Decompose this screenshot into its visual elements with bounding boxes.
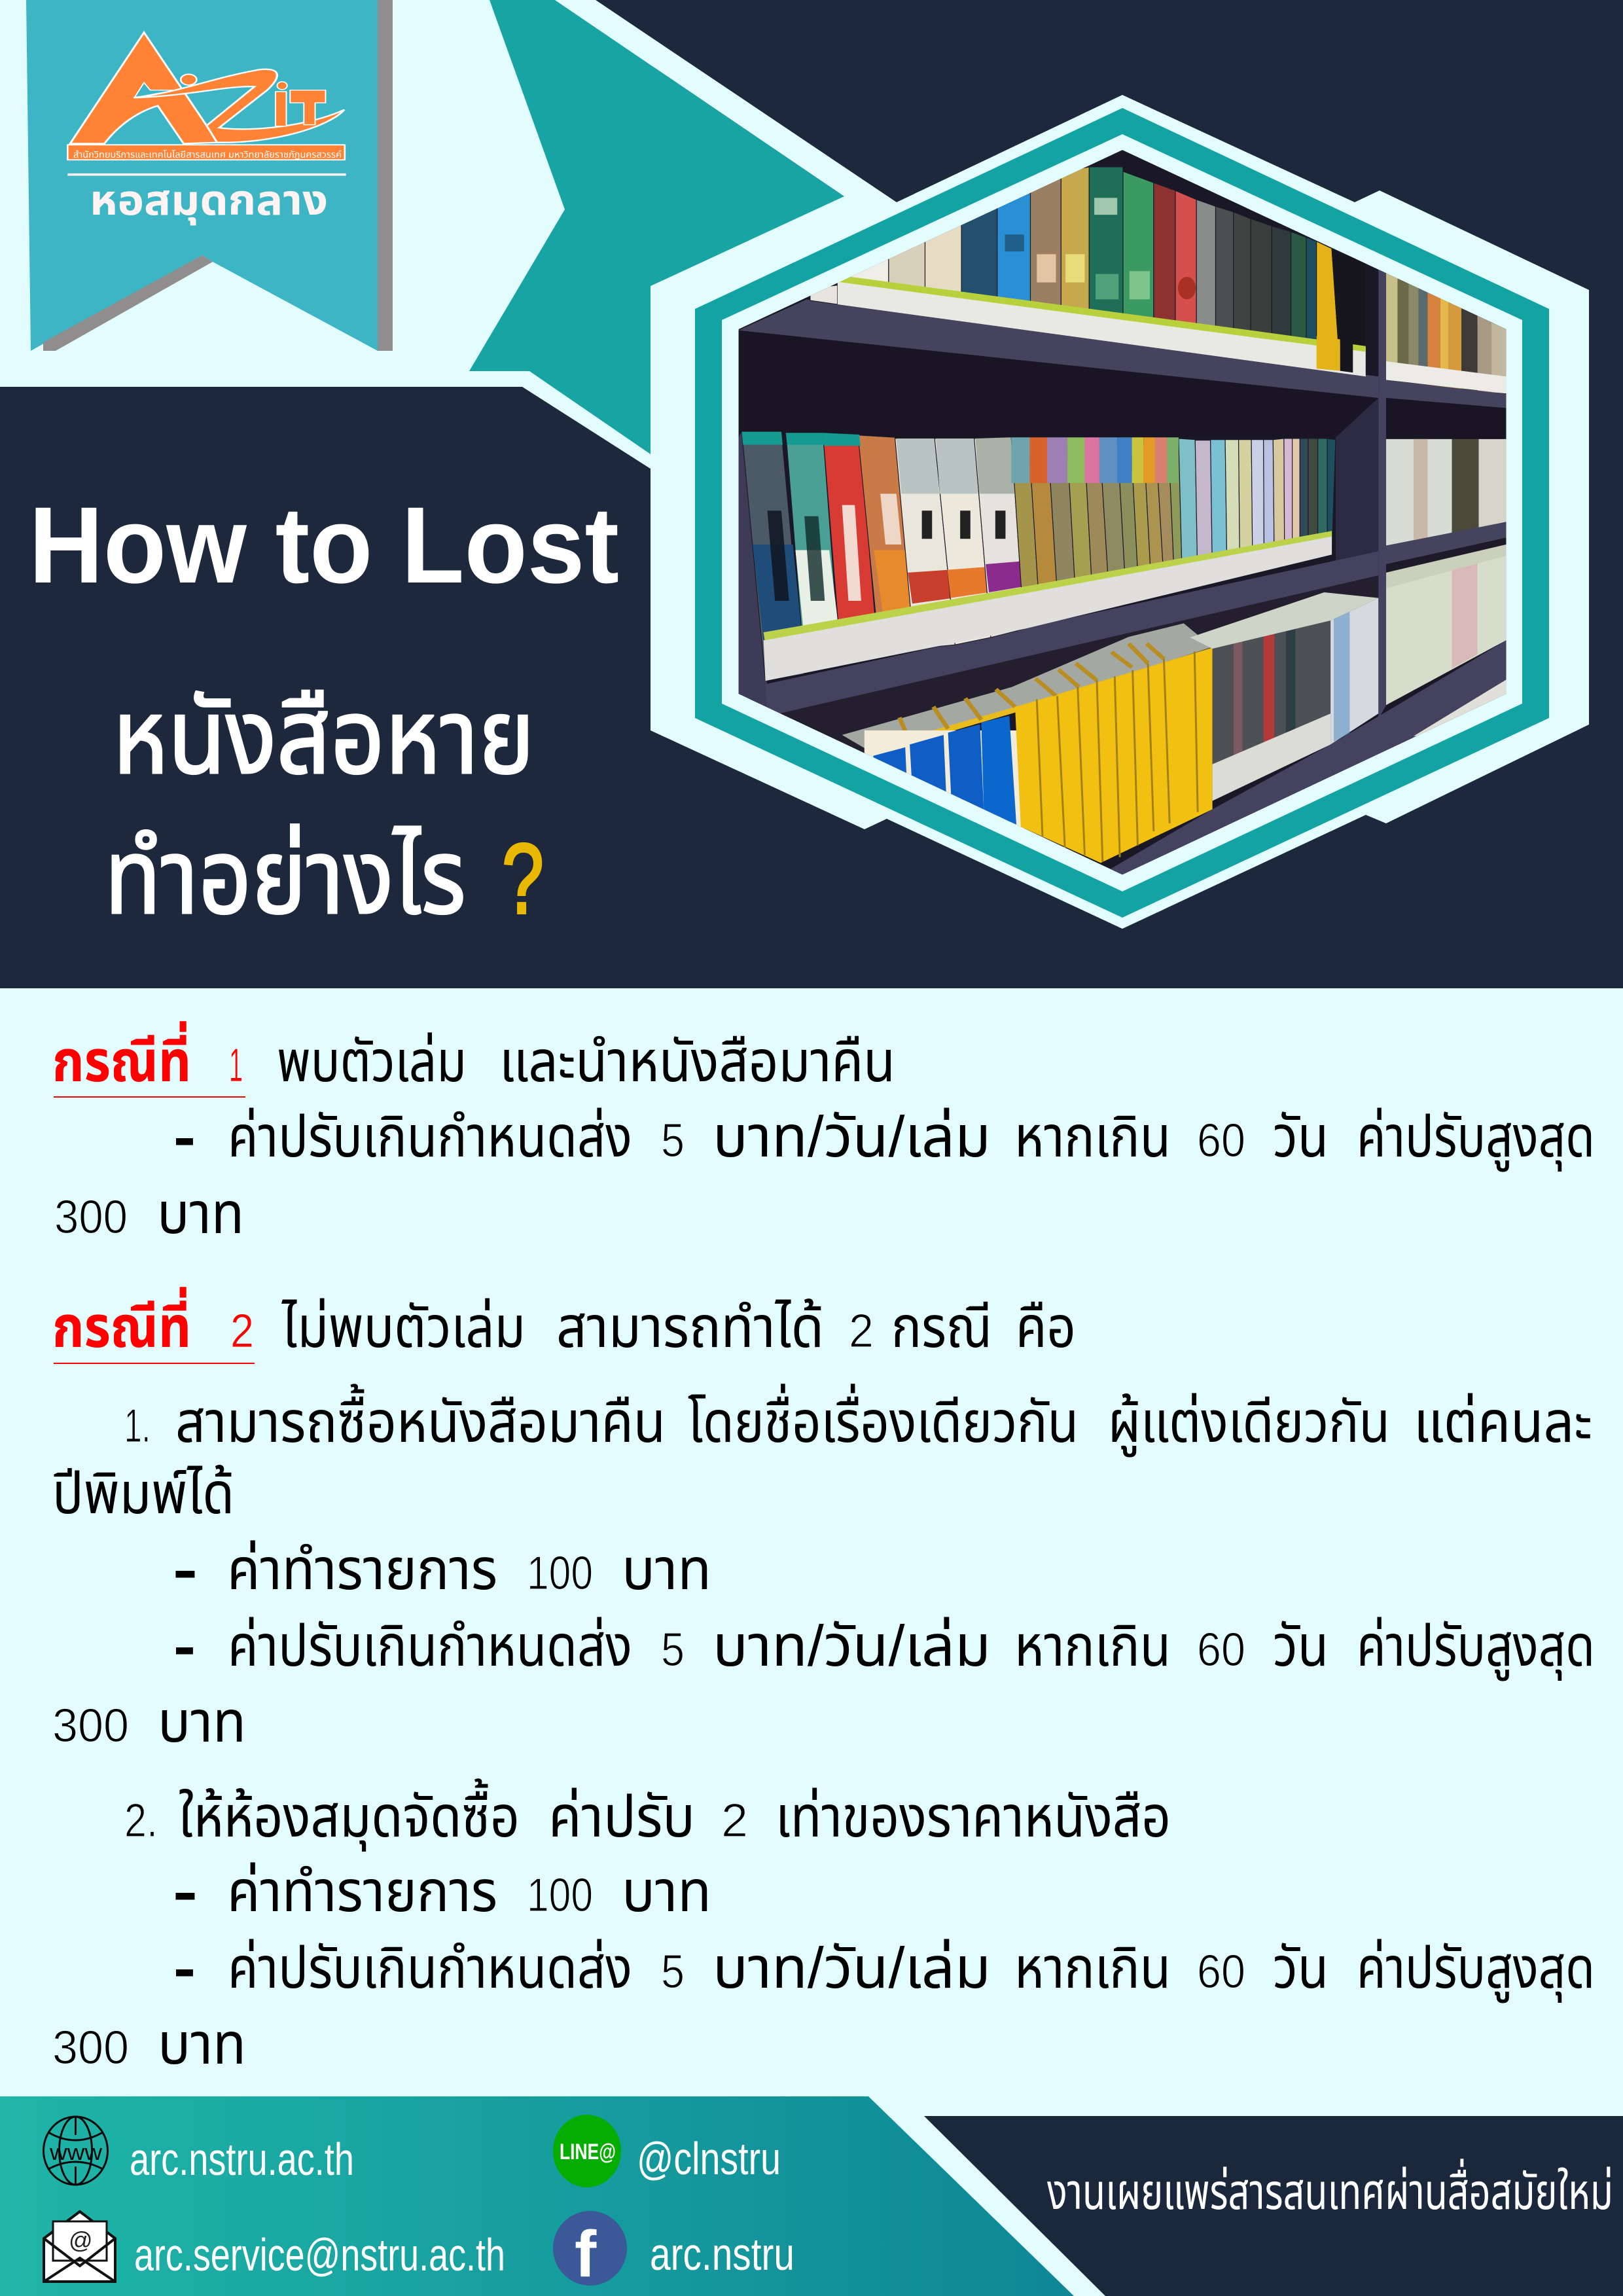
middle row of books [741, 432, 1336, 681]
option 1 cataloguing fee [173, 1537, 711, 1602]
logo small text: สำนักวิทยบริการและเทคโนโลยีสารสนเทศ มหาวิทยาลัยราชภัฏนครสวรรค์ [73, 149, 342, 160]
logo: ARIT mark [67, 33, 346, 176]
option 2 fine line [52, 1935, 1595, 2076]
option 1: ผู้แต่งเดียวกัน [1108, 1390, 1390, 1457]
case 1 fine line continued [54, 1181, 244, 1246]
question mark: ? [502, 823, 544, 935]
photo: library bookshelf [739, 150, 1506, 874]
case 1 fine line: วัน [1273, 1104, 1329, 1169]
heading: Thai line 2: ทำอย่างไร [105, 818, 466, 935]
option 2 cataloguing fee: บาท [622, 1859, 711, 1924]
option 1 fine line: 60 [1197, 1624, 1245, 1676]
case 1 fine line: ค่าปรับเกินกำหนดส่ง [228, 1104, 632, 1169]
footer teal panel [0, 2096, 1074, 2296]
small dark spines [1213, 620, 1330, 801]
case 1 fine line: บาท/วัน/เล่ม [713, 1104, 991, 1169]
option 2 cataloguing fee: - [173, 1859, 198, 1924]
case 1 fine line continued: 300 [54, 1191, 128, 1244]
case 1 heading: 1 [229, 1039, 243, 1092]
body text [52, 1021, 1595, 2076]
option 1 fine line: - [173, 1613, 196, 1678]
case 1 heading [52, 1021, 895, 1098]
facebook text: arc.nstru [650, 2229, 794, 2280]
website text: arc.nstru.ac.th [130, 2134, 354, 2185]
top edge highlights [897, 642, 1213, 730]
option 2 fine line: บาท/วัน/เล่ม [713, 1935, 991, 2000]
case 1 fine line [173, 1104, 1595, 1172]
email text: arc.service@nstru.ac.th [134, 2229, 505, 2280]
icon: globe [43, 2117, 107, 2185]
option 2: 2 [721, 1795, 748, 1847]
option 2 cataloguing fee: ค่าทำรายการ [227, 1859, 497, 1924]
heading: Thai line 1: หนังสือหาย [113, 678, 535, 795]
option 1: ปีพิมพ์ได้ [52, 1461, 234, 1526]
option 2: เท่าของราคาหนังสือ [776, 1784, 1171, 1849]
pale spines lower right [1330, 598, 1378, 745]
case 1 heading: และนำหนังสือมาคืน [499, 1029, 895, 1094]
case 1 fine line: 5 [661, 1115, 685, 1167]
line id text: @clnstru [637, 2133, 781, 2184]
option 1 [52, 1384, 1592, 1526]
icon: envelope [44, 2212, 115, 2282]
pale hexagon frame [651, 95, 1589, 929]
option 1 cataloguing fee: บาท [622, 1537, 711, 1602]
pale band along teal arrow [555, 0, 897, 223]
option 1: โดยชื่อเรื่องเดียวกัน [688, 1384, 1079, 1454]
case 2 heading: ไม่พบตัวเล่ม [281, 1295, 526, 1359]
coloured caps on middle row [741, 432, 1179, 483]
case 2 heading: 2 [230, 1305, 254, 1357]
option 2: ให้ห้องสมุดจัดซื้อ [179, 1778, 520, 1852]
option 1 fine line: ค่าปรับเกินกำหนดส่ง [228, 1613, 632, 1678]
teal hexagon frame [695, 108, 1549, 918]
option 1: 1. [124, 1400, 151, 1452]
book highlights top row [1005, 198, 1196, 299]
heading: How to Lost: How to Lost [29, 485, 619, 606]
option 1 cataloguing fee: 100 [527, 1547, 593, 1600]
case 1 fine line: 60 [1197, 1115, 1245, 1167]
blue book spines [864, 716, 1024, 829]
case 2 heading: กรณีที่ [52, 1287, 191, 1359]
title [29, 485, 619, 935]
icon: globe: www [49, 2140, 102, 2165]
option 1 fine line: บาท/วัน/เล่ม [713, 1613, 991, 1678]
case 2 heading: 2 [849, 1305, 874, 1357]
case 2 heading: คือ [1016, 1295, 1076, 1359]
option 2 fine line: หากเกิน [1014, 1935, 1171, 2000]
option 2 fine line: ค่าปรับเกินกำหนดส่ง [228, 1935, 632, 2000]
option 2: 2. [124, 1795, 158, 1847]
option 1: แต่คนละ [1414, 1390, 1592, 1454]
bookmark ribbon with logo [26, 0, 393, 351]
shelf 2 board and side [739, 432, 1378, 716]
option 1: สามารถซื้อหนังสือมาคืน [175, 1384, 666, 1454]
option 2 fine line: 300 [52, 2022, 129, 2074]
case 1 fine line continued: บาท [157, 1181, 244, 1246]
option 2 fine line: บาท [158, 2011, 246, 2076]
teal arrow shape [469, 0, 844, 456]
option 1 fine line [52, 1613, 1595, 1754]
ribbon [26, 0, 393, 351]
option 2 [124, 1778, 1171, 1852]
option 2 cataloguing fee [173, 1859, 711, 1924]
vertical divider [1378, 257, 1386, 719]
option 1 cataloguing fee: ค่าทำรายการ [227, 1537, 497, 1602]
top row of books [810, 167, 1366, 376]
inner side board [1336, 398, 1378, 560]
option 2 cataloguing fee: 100 [527, 1869, 593, 1922]
case 1 heading: กรณีที่ [52, 1021, 191, 1094]
icon: Facebook: f [575, 2217, 597, 2291]
option 1 cataloguing fee: - [173, 1537, 198, 1602]
right section books [1386, 273, 1506, 705]
option 2 fine line: วัน [1273, 1935, 1329, 2000]
case 1 heading: พบตัวเล่ม [277, 1029, 467, 1094]
lower row book tops [842, 623, 1213, 751]
floor [1101, 640, 1506, 874]
case 2 heading [52, 1287, 1076, 1364]
case 2 heading: กรณี [891, 1295, 992, 1359]
option 1 fine line: 5 [661, 1624, 685, 1676]
option 2 fine line: 60 [1197, 1946, 1245, 1998]
option 2 fine line: - [173, 1935, 196, 2000]
shelf 1 board and cavity [739, 299, 1378, 437]
yellow book spines [1015, 649, 1213, 863]
icon: LINE [553, 2115, 621, 2187]
icon: LINE: LINE@ [560, 2140, 616, 2164]
case 1 fine line: หากเกิน [1014, 1104, 1171, 1169]
case 2 heading: สามารถทำได้ [556, 1295, 824, 1359]
icon: envelope: @ [69, 2227, 93, 2253]
option 1 fine line: วัน [1273, 1613, 1329, 1678]
icon: Facebook [553, 2211, 627, 2291]
option 1 fine line: หากเกิน [1014, 1613, 1171, 1678]
inner pale hexagon frame [722, 134, 1522, 891]
option 2 fine line: 5 [661, 1946, 685, 1998]
lower row cavity [767, 575, 1378, 753]
library name: หอสมุดกลาง [90, 177, 328, 226]
book titles middle row [767, 493, 1005, 601]
option 1 fine line: บาท [158, 1689, 246, 1754]
header dark background [0, 0, 1623, 988]
case 1 fine line: - [173, 1104, 196, 1169]
option 2: ค่าปรับ [548, 1784, 695, 1849]
option 1 fine line: 300 [52, 1700, 129, 1752]
footer dark panel [924, 2116, 1623, 2296]
